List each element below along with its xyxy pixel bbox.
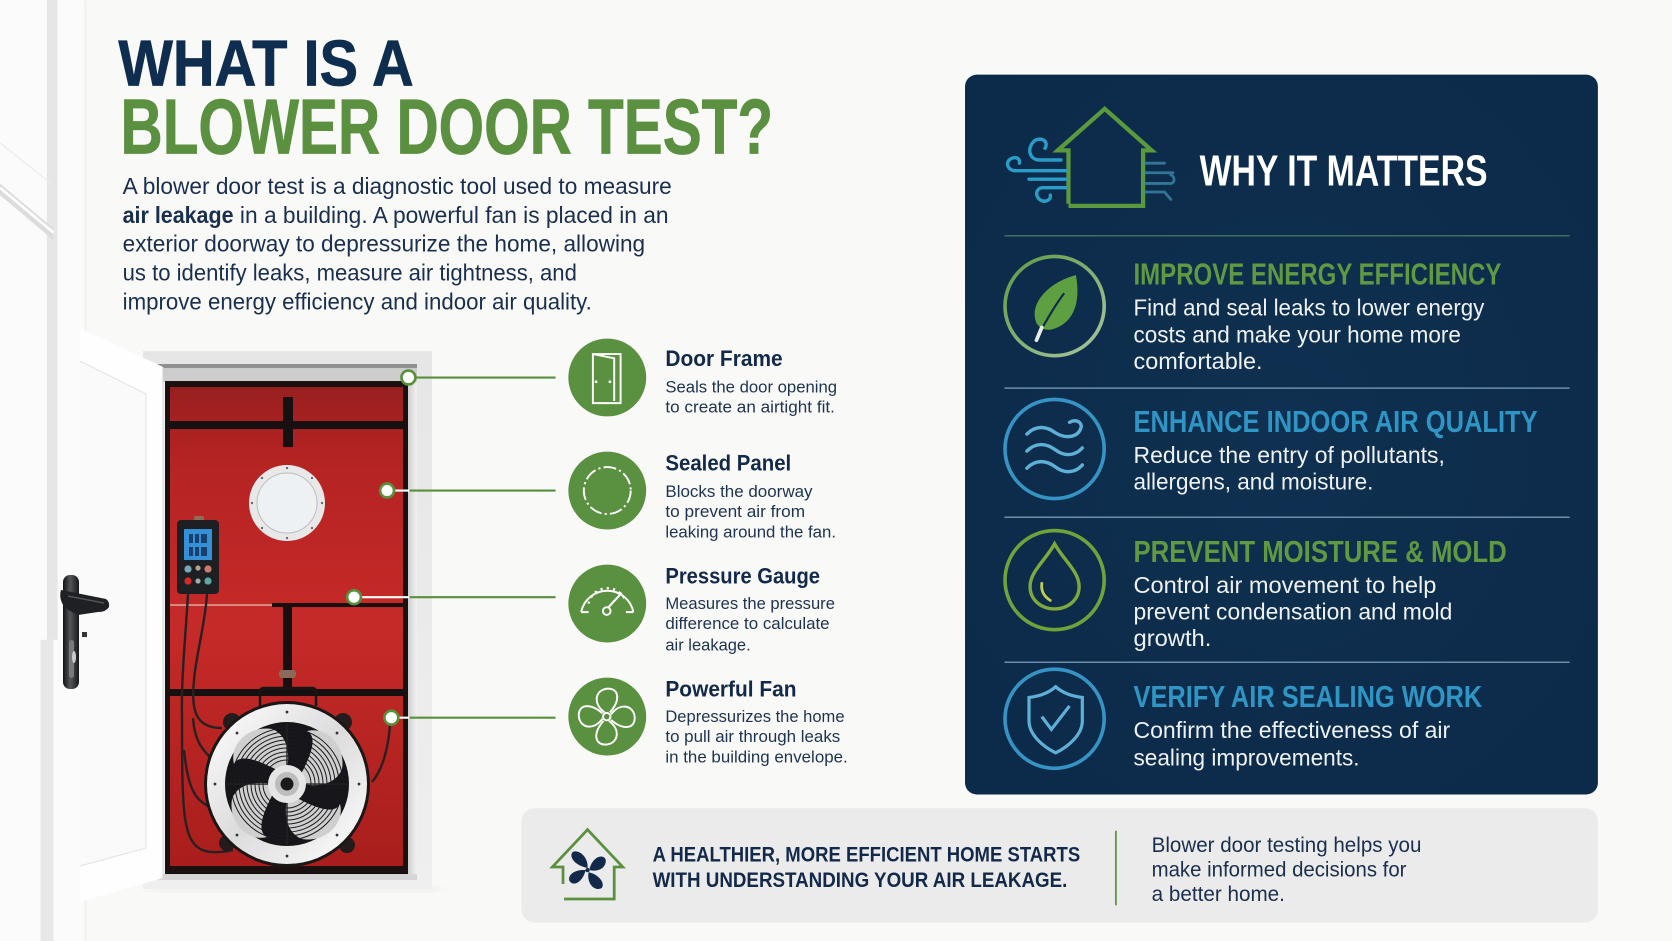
text: allergens, and moisture.: [1134, 468, 1373, 494]
title: [118, 26, 773, 171]
label: sealed panel: Sealed Panel: [665, 450, 791, 475]
icon: leaf: [1005, 256, 1104, 356]
label: pressure gauge: Pressure Gauge: [665, 563, 820, 588]
icon: shield: [1005, 669, 1104, 768]
banner headline: A HEALTHIER, MORE EFFICIENT HOME STARTS: [653, 843, 1080, 867]
text: growth.: [1134, 625, 1211, 651]
text: ENHANCE INDOOR AIR QUALITY: [1134, 404, 1538, 439]
callout lines and markers: [347, 371, 556, 725]
icon: dashed circle: [568, 452, 646, 529]
text: sealing improvements.: [1134, 745, 1360, 771]
text: [1134, 534, 1507, 651]
door handle: [60, 575, 109, 689]
bottom banner: [521, 808, 1598, 922]
intro paragraph: improve energy efficiency and indoor air quality.: [123, 288, 592, 314]
gauge cords: [182, 594, 390, 852]
label: pressure gauge: Measures the pressure: [665, 594, 835, 613]
label: pressure gauge: difference to calculate: [665, 614, 830, 633]
component: pressure gauge: [568, 563, 835, 654]
benefit: enhance indoor air quality: [1005, 399, 1538, 499]
title: BLOWER DOOR TEST?: [120, 85, 773, 171]
banner text: a better home.: [1152, 882, 1285, 906]
banner headline: [653, 843, 1080, 892]
panel window: [249, 465, 325, 541]
label: powerful fan: in the building envelope.: [665, 747, 848, 766]
text: [1134, 404, 1538, 494]
intro paragraph: A blower door test is a diagnostic tool used to measure: [123, 173, 672, 199]
text: VERIFY AIR SEALING WORK: [1134, 679, 1483, 714]
intro paragraph: in a building. A powerful fan is placed in an: [240, 202, 669, 228]
label: door frame: Door Frame: [665, 346, 783, 371]
callout: pressure gauge: [347, 590, 556, 604]
banner headline: WITH UNDERSTANDING YOUR AIR LEAKAGE.: [653, 868, 1067, 892]
text: costs and make your home more: [1134, 321, 1461, 347]
intro paragraph: [123, 173, 672, 314]
text: Control air movement to help: [1134, 572, 1436, 598]
label: sealed panel: Blocks the doorway: [665, 482, 813, 501]
text: prevent condensation and mold: [1134, 599, 1452, 625]
component: sealed panel: [568, 450, 836, 541]
icon: fan: [568, 678, 646, 756]
label: door frame: [665, 346, 837, 417]
intro paragraph: air leakage: [123, 202, 234, 228]
banner text: Blower door testing helps you: [1152, 833, 1421, 857]
callout: door frame: [401, 371, 556, 384]
label: door frame: Seals the door opening: [665, 377, 837, 396]
text: IMPROVE ENERGY EFFICIENCY: [1134, 257, 1502, 292]
heading: why it matters: WHY IT MATTERS: [1200, 147, 1488, 196]
icon: house with wind: [1008, 109, 1174, 206]
intro paragraph: exterior doorway to depressurize the home, allowing: [123, 231, 645, 257]
benefit: prevent moisture and mold: [1005, 531, 1507, 651]
callout: sealed panel: [380, 484, 556, 497]
label: powerful fan: to pull air through leaks: [665, 727, 840, 746]
text: [1134, 679, 1483, 771]
label: powerful fan: Depressurizes the home: [665, 707, 845, 726]
door and wall illustration: [0, 0, 440, 941]
sealed red panel: [165, 381, 408, 874]
icon: gauge dial: [568, 565, 646, 642]
label: powerful fan: Powerful Fan: [665, 676, 797, 701]
text: PREVENT MOISTURE & MOLD: [1134, 534, 1507, 569]
icon: door: [568, 339, 646, 416]
intro paragraph: us to identify leaks, measure air tightness, and: [123, 259, 577, 285]
text: comfortable.: [1134, 348, 1263, 374]
panel: why it matters: [965, 75, 1598, 794]
text: Reduce the entry of pollutants,: [1134, 442, 1445, 468]
icon: water drop: [1005, 531, 1104, 630]
callout: powerful fan: [384, 711, 556, 725]
icon: house with fan: [552, 830, 623, 899]
text: Confirm the effectiveness of air: [1134, 717, 1451, 743]
door frame: [143, 351, 440, 891]
label: powerful fan: [665, 676, 848, 766]
label: sealed panel: [665, 450, 836, 541]
open door leaf: [80, 328, 163, 902]
component: door frame: [568, 339, 837, 417]
text: Find and seal leaks to lower energy: [1134, 295, 1485, 321]
benefit: verify air sealing work: [1005, 669, 1483, 771]
text: [1134, 257, 1502, 374]
banner text: make informed decisions for: [1152, 858, 1406, 882]
label: sealed panel: to prevent air from: [665, 502, 805, 521]
label: door frame: to create an airtight fit.: [665, 398, 835, 417]
label: pressure gauge: [665, 563, 835, 654]
component: powerful fan: [568, 676, 848, 766]
banner text: [1152, 833, 1421, 906]
pressure gauge device: [177, 516, 219, 594]
label: pressure gauge: air leakage.: [665, 635, 751, 654]
icon: air waves: [1005, 399, 1104, 499]
wall trim: [0, 0, 86, 941]
title: WHAT IS A: [118, 26, 414, 99]
benefit: improve energy efficiency: [1005, 256, 1502, 374]
label: sealed panel: leaking around the fan.: [665, 522, 836, 541]
powerful fan: [204, 688, 370, 867]
